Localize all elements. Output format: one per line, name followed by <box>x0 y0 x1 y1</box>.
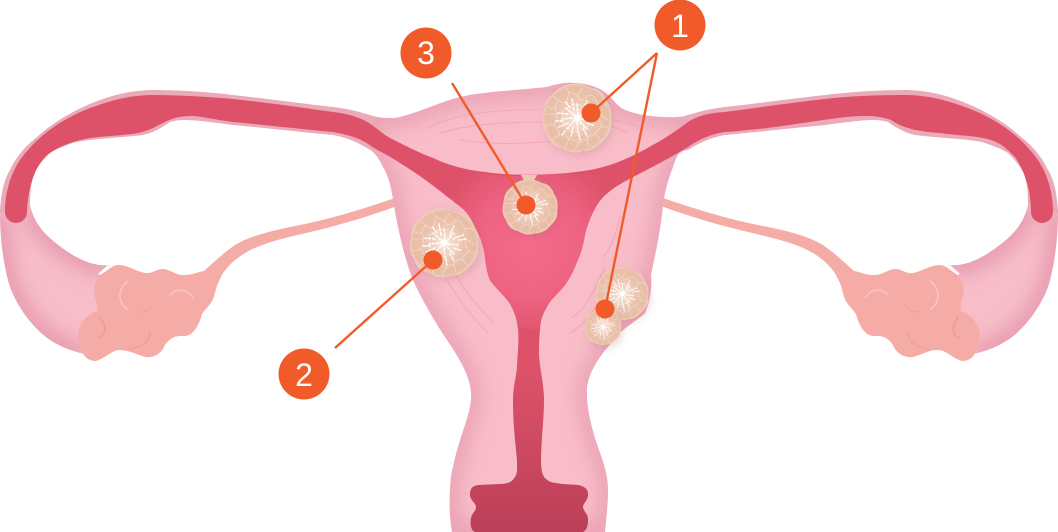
marker 2 <box>278 348 330 400</box>
marker 2: 2 <box>295 357 313 393</box>
fibroid: right small <box>585 309 621 345</box>
fibroid stalk <box>521 175 537 186</box>
right fallopian tube, ligament and ovary <box>661 90 1058 361</box>
leader end dots <box>424 104 614 318</box>
fibroid: submucosal <box>503 179 558 235</box>
fibroid: right large <box>596 267 649 321</box>
marker 3 <box>400 28 452 78</box>
marker 3: 3 <box>417 35 435 71</box>
marker 1: 1 <box>671 8 689 44</box>
marker 1 <box>654 0 706 50</box>
fibroid: intramural <box>410 208 479 277</box>
uterus body <box>368 83 692 532</box>
leader lines <box>335 53 657 348</box>
fibroid: subserosal top <box>543 83 612 152</box>
muscle fibre lines <box>427 110 642 333</box>
left fallopian tube, ligament and ovary <box>0 90 397 361</box>
